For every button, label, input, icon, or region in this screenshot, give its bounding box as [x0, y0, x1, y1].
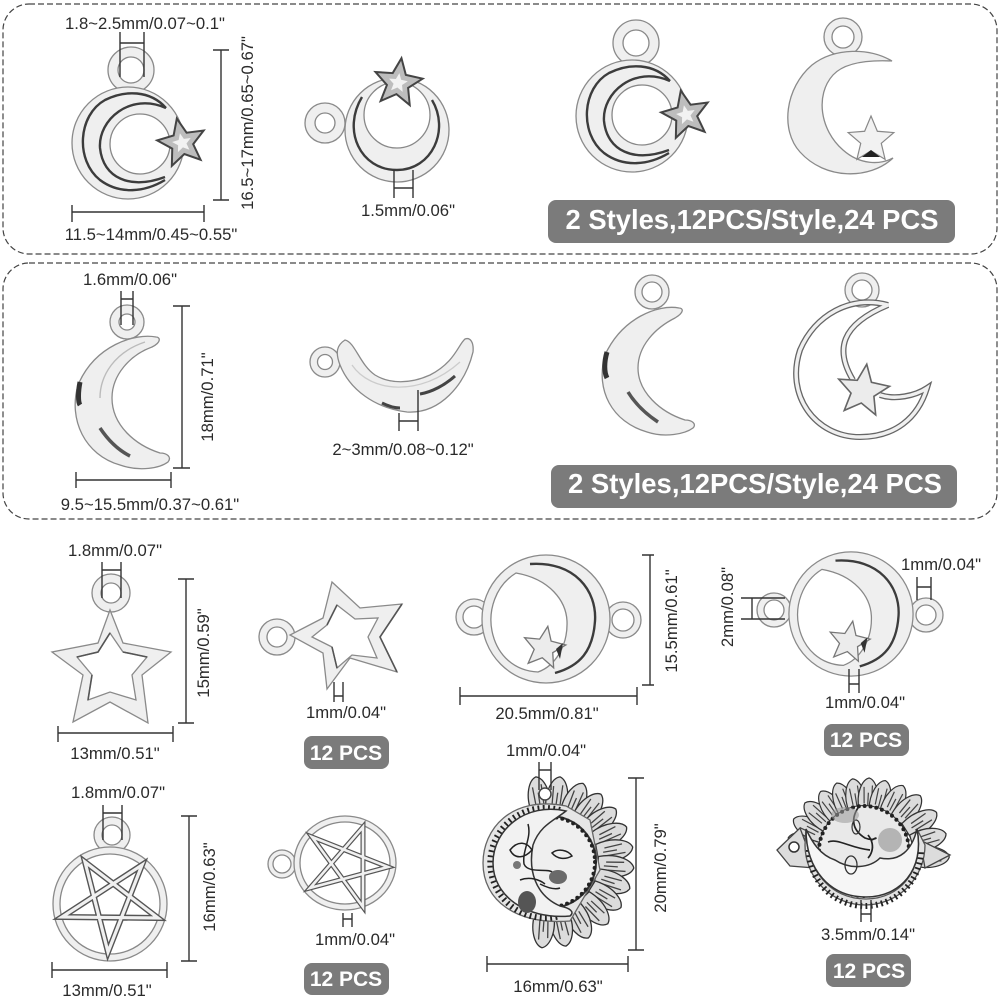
badge: 2 styles second — [551, 465, 957, 508]
dimension: 20mm label — [628, 778, 670, 950]
dimension: 16mm label — [487, 956, 628, 996]
panel: top group frame — [3, 4, 997, 254]
charm: connector moon front — [757, 552, 943, 676]
dimension: 1.8mm label — [68, 541, 162, 598]
dimension: 1mm label — [506, 741, 586, 790]
dimension: rim width label: 1.5mm/0.06" — [361, 201, 455, 220]
dimension: 15mm label: 15mm/0.59" — [194, 608, 213, 698]
dimension: 3.5mm label — [821, 900, 915, 944]
badge: 2 styles top: 2 Styles,12PCS/Style,24 PCS — [566, 204, 938, 235]
dimension: 2~3mm label: 2~3mm/0.08~0.12" — [332, 440, 474, 459]
charm: sun and moon crescent — [777, 777, 950, 906]
dimension: height label — [213, 36, 257, 210]
badge: 12 PCS: 12 PCS — [833, 960, 905, 983]
dimension: 20mm label: 20mm/0.79" — [651, 823, 670, 913]
dimension: 18mm label: 18mm/0.71" — [198, 352, 217, 442]
dimension: width label: 11.5~14mm/0.45~0.55" — [65, 225, 237, 244]
charm: slim crescent rotated — [310, 339, 473, 412]
dimension: 20.5mm label — [460, 687, 637, 723]
charm: ring moon with star, front — [576, 20, 713, 172]
dimension: 2mm label — [718, 567, 785, 647]
dimension: 1.6mm label: 1.6mm/0.06" — [83, 270, 177, 289]
dimension: 1mm bottom label: 1mm/0.04" — [825, 693, 905, 712]
dimension: 2~3mm label — [332, 390, 474, 459]
dimension: 13mm label — [52, 962, 167, 1000]
dimension: 1mm top label — [901, 555, 981, 600]
dimension: 15mm label — [178, 579, 213, 723]
dimension: crescent width label — [61, 472, 239, 514]
badge: 2 styles second: 2 Styles,12PCS/Style,24 PCS — [568, 468, 942, 499]
charm: plain crescent with star — [788, 18, 894, 174]
dimension: 13mm label: 13mm/0.51" — [70, 744, 160, 763]
dimension: 15.5mm label: 15.5mm/0.61" — [662, 569, 681, 673]
dimension: 1mm label: 1mm/0.04" — [506, 741, 586, 760]
dimension: bail width label — [65, 14, 225, 77]
dimension: rim width label — [361, 170, 455, 220]
badge: 2 styles top — [548, 200, 955, 243]
charm: ring moon rotated — [305, 55, 449, 182]
dimension: 1mm label: 1mm/0.04" — [306, 703, 386, 722]
dimension: 1mm label: 1mm/0.04" — [315, 930, 395, 949]
charm: star rotated — [259, 582, 402, 689]
charm: slim crescent front — [602, 275, 694, 435]
dimension: 16mm label: 16mm/0.63" — [200, 842, 219, 932]
dimension: 20.5mm label: 20.5mm/0.81" — [495, 704, 599, 723]
dimension: 13mm label: 13mm/0.51" — [62, 981, 152, 1000]
badge: 12 PCS: 12 PCS — [830, 729, 902, 752]
dimension: 13mm label — [58, 726, 173, 763]
dimension: 1.8mm label: 1.8mm/0.07" — [71, 783, 165, 802]
charm: star outline — [52, 574, 171, 723]
dimension: 2mm label: 2mm/0.08" — [718, 567, 737, 647]
charm: connector moon — [456, 555, 641, 683]
dimension: 1.8mm label — [71, 783, 165, 840]
dimension: 15.5mm label — [642, 555, 681, 685]
charm: pentagram rotated — [268, 816, 396, 910]
dimension: height label: 16.5~17mm/0.65~0.67" — [238, 36, 257, 210]
dimension: 3.5mm label: 3.5mm/0.14" — [821, 925, 915, 944]
dimension: 1mm label — [315, 913, 395, 949]
dimension: 16mm label — [181, 816, 219, 961]
charm: slim crescent — [75, 305, 169, 469]
badge: 12 PCS: 12 PCS — [310, 742, 382, 765]
charm: open moon with star — [796, 273, 927, 437]
charm: ring moon with star, measured — [72, 47, 209, 199]
badge: 12 PCS: 12 PCS — [310, 968, 382, 991]
dimension: crescent width label: 9.5~15.5mm/0.37~0.61" — [61, 495, 239, 514]
badge: 12 PCS — [824, 724, 909, 756]
dimension: width label — [65, 205, 237, 244]
badge: 12 PCS — [304, 963, 389, 995]
dimension: 1mm top label: 1mm/0.04" — [901, 555, 981, 574]
dimension: 1.6mm label — [83, 270, 177, 325]
dimension: 18mm label — [173, 306, 217, 468]
dimension: 16mm label: 16mm/0.63" — [513, 977, 603, 996]
badge: 12 PCS — [304, 736, 389, 769]
dimension: 1mm bottom label — [825, 669, 905, 712]
dimension: 1.8mm label: 1.8mm/0.07" — [68, 541, 162, 560]
dimension: bail width label: 1.8~2.5mm/0.07~0.1" — [65, 14, 225, 33]
charm: sun and moon face — [483, 775, 635, 949]
panel: second group frame — [3, 263, 997, 519]
badge: 12 PCS — [826, 954, 911, 987]
dimension: 1mm label — [306, 682, 386, 722]
charm: pentagram circle — [53, 817, 167, 961]
